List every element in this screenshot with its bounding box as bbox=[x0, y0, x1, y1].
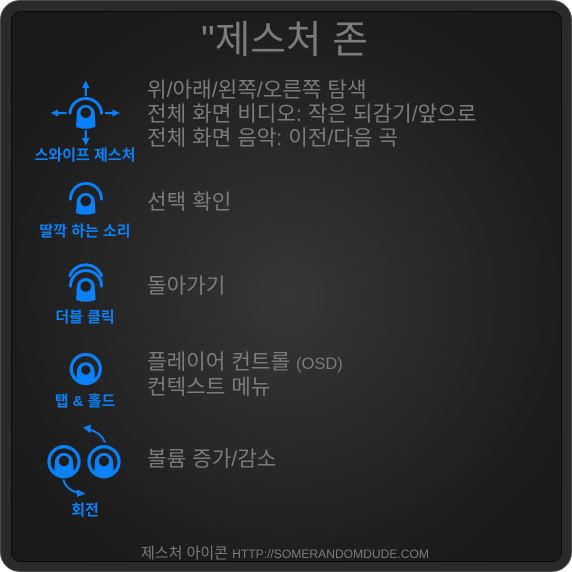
text block: swipe gesture description: 전체 화면 음악: 이전/다음 곡 bbox=[147, 126, 398, 150]
footer credit: 제스처 아이콘 HTTP://SOMERANDOMDUDE.COM bbox=[141, 545, 429, 562]
text block: swipe gesture description: 전체 화면 비디오: 작은 되감기/앞으로 bbox=[147, 102, 476, 126]
label: tap and hold: 탭 & 홀드 bbox=[55, 393, 115, 410]
label: swipe gesture: 스와이프 제스처 bbox=[35, 147, 135, 164]
title: "제스처 존 bbox=[201, 19, 368, 62]
text block: tap and hold description: 컨텍스트 메뉴 bbox=[147, 375, 270, 399]
label: double click: 더블 클릭 bbox=[55, 309, 115, 326]
label: rotate: 회전 bbox=[71, 502, 99, 519]
text block: tap and hold description bbox=[147, 350, 343, 399]
text block: double click description: 돌아가기 bbox=[147, 274, 225, 298]
text block: click description: 선택 확인 bbox=[147, 190, 231, 214]
label: click: 딸깍 하는 소리 bbox=[39, 223, 131, 240]
text block: swipe gesture description: 위/아래/왼쪽/오른쪽 탐색 bbox=[147, 78, 367, 102]
text block: swipe gesture description bbox=[147, 78, 476, 150]
text block: rotate description: 볼륨 증가/감소 bbox=[147, 447, 276, 471]
text block: tap and hold description: 플레이어 컨트롤 (OSD) bbox=[147, 350, 343, 374]
